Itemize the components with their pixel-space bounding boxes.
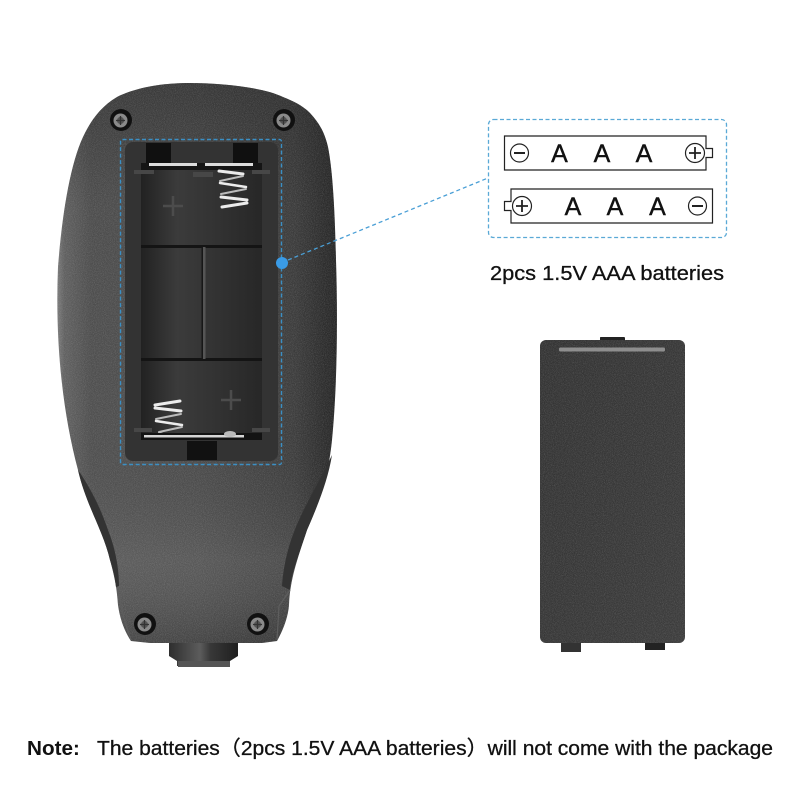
bottom contacts — [134, 428, 270, 460]
callout connector line — [288, 178, 488, 260]
callout box: batteries — [488, 120, 726, 238]
note: : — [73, 737, 80, 760]
battery cover — [540, 337, 685, 652]
note: The batteries（2pcs 1.5V AAA batteries）will not come with the package — [97, 737, 773, 760]
lower bumper seams — [118, 590, 290, 640]
battery caption: 2pcs 1.5V AAA batteries — [490, 262, 724, 285]
compartment dashed outline — [120, 140, 282, 464]
panel: gauge device back — [57, 83, 337, 667]
battery 2: A — [649, 193, 666, 221]
battery 2 — [504, 189, 712, 223]
side grip bands — [78, 455, 332, 590]
callout dot — [276, 257, 288, 269]
note: Note — [27, 737, 73, 760]
top contacts — [134, 143, 270, 177]
battery 1: A — [551, 140, 568, 168]
nozzle — [169, 640, 238, 667]
screws — [110, 109, 295, 635]
battery 1: A — [594, 140, 611, 168]
plus marks — [163, 196, 241, 410]
ribs — [141, 245, 262, 361]
battery 2: A — [565, 193, 582, 221]
battery 1 — [504, 136, 712, 170]
battery compartment — [125, 142, 278, 461]
springs — [155, 171, 247, 437]
device body — [57, 83, 337, 643]
battery 2: A — [607, 193, 624, 221]
battery 1: A — [636, 140, 653, 168]
